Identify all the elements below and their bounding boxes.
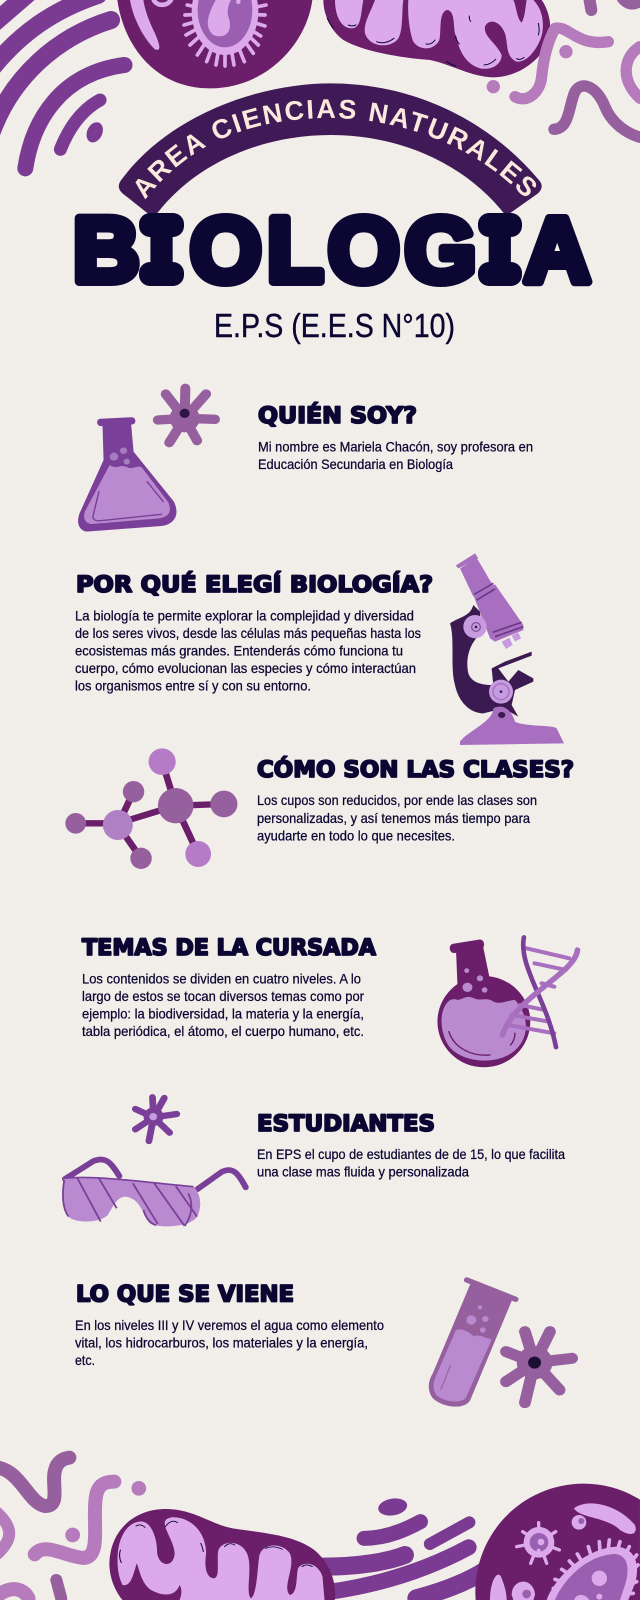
- text: estudiantes: En EPS el cupo de estudiantes de de 15, lo que facilita: [257, 1146, 565, 1162]
- icon: virus 2: [135, 1097, 177, 1141]
- text: como son: Los cupos son reducidos, por ende las clases son: [257, 792, 537, 808]
- icon: microscope: [450, 553, 564, 745]
- panel: estudiantes: [257, 1112, 565, 1180]
- organelle stripes top left: [0, 0, 125, 168]
- text: por que: La biología te permite explorar la complejidad y diversidad: [75, 608, 414, 624]
- heading: lo que se viene: LO QUE SE VIENE: [76, 1282, 294, 1308]
- icon: molecule: [65, 748, 237, 869]
- heading: quien soy: QUIÉN SOY?: [258, 403, 417, 429]
- icon: virus 1: [158, 388, 215, 443]
- bottom decoration: [0, 1458, 640, 1600]
- text: lo que se viene: etc.: [75, 1352, 95, 1368]
- panel: lo que se viene: [75, 1282, 384, 1368]
- text: por que: [75, 608, 421, 694]
- text: por que: los organismos entre sí y con su entorno.: [75, 678, 311, 694]
- text: por que: cuerpo, cómo evolucionan las especies y cómo interactúan: [75, 660, 416, 676]
- banner text: AREA CIENCIAS NATURALES: [136, 99, 536, 200]
- text: como son: ayudarte en todo lo que necesites.: [257, 828, 455, 844]
- title arc banner: [118, 83, 542, 214]
- heading: por que: POR QUÉ ELEGÍ BIOLOGÍA?: [76, 572, 433, 598]
- text: lo que se viene: vital, los hidrocarburos, los materiales y la energía,: [75, 1334, 368, 1350]
- text: temas: largo de estos se tocan diversos temas como por: [82, 988, 364, 1004]
- text: temas: [82, 970, 364, 1039]
- mitochondrion bottom: [109, 1509, 335, 1600]
- text: estudiantes: una clase mas fluida y personalizada: [257, 1164, 469, 1180]
- icon: round flask and dna: [437, 937, 577, 1067]
- heading: temas: TEMAS DE LA CURSADA: [82, 936, 376, 961]
- subtitle: E.P.S (E.E.S N°10): [214, 307, 455, 344]
- text: estudiantes: [257, 1146, 565, 1180]
- stripes bottom: [322, 1496, 486, 1598]
- heading: como son: CÓMO SON LAS CLASES?: [257, 757, 574, 783]
- text: temas: Los contenidos se dividen en cuatro niveles. A lo: [82, 970, 361, 986]
- panel: como son las clases: [257, 757, 574, 844]
- text: por que: de los seres vivos, desde las células más pequeñas hasta los: [75, 625, 421, 641]
- panel: quien soy: [258, 403, 533, 472]
- icon: test tube: [429, 1280, 516, 1407]
- text: como son: [257, 792, 537, 844]
- text: como son: personalizadas, y así tenemos más tiempo para: [257, 810, 530, 826]
- mitochondrion top: [323, 0, 550, 77]
- text: quien soy: Educación Secundaria en Biología: [258, 456, 453, 472]
- worms bottom left: [0, 1458, 146, 1598]
- text: lo que se viene: [75, 1317, 384, 1368]
- text: quien soy: [258, 438, 533, 472]
- icon: safety glasses: [63, 1159, 246, 1226]
- text: temas: ejemplo: la biodiversidad, la materia y la energía,: [82, 1006, 364, 1022]
- text: por que: ecosistemas más grandes. Entenderás cómo funciona tu: [75, 642, 403, 658]
- cell top: [117, 0, 312, 88]
- cell bottom: [475, 1484, 640, 1600]
- icon: virus 3: [506, 1332, 572, 1403]
- dna strands: [502, 937, 577, 1047]
- text: temas: tabla periódica, el átomo, el cuerpo humano, etc.: [82, 1023, 364, 1039]
- text: lo que se viene: En los niveles III y IV veremos el agua como elemento: [75, 1317, 384, 1333]
- worms top right: [487, 0, 640, 137]
- icon: erlenmeyer flask: [78, 417, 176, 532]
- panel: por que elegi biologia: [75, 572, 433, 694]
- text: quien soy: Mi nombre es Mariela Chacón, soy profesora en: [258, 438, 533, 454]
- heading: estudiantes: ESTUDIANTES: [257, 1112, 435, 1137]
- panel: temas de la cursada: [82, 936, 376, 1039]
- title: BIOLOGIA: BIOLOGIA: [73, 200, 590, 302]
- top decoration: [0, 0, 640, 168]
